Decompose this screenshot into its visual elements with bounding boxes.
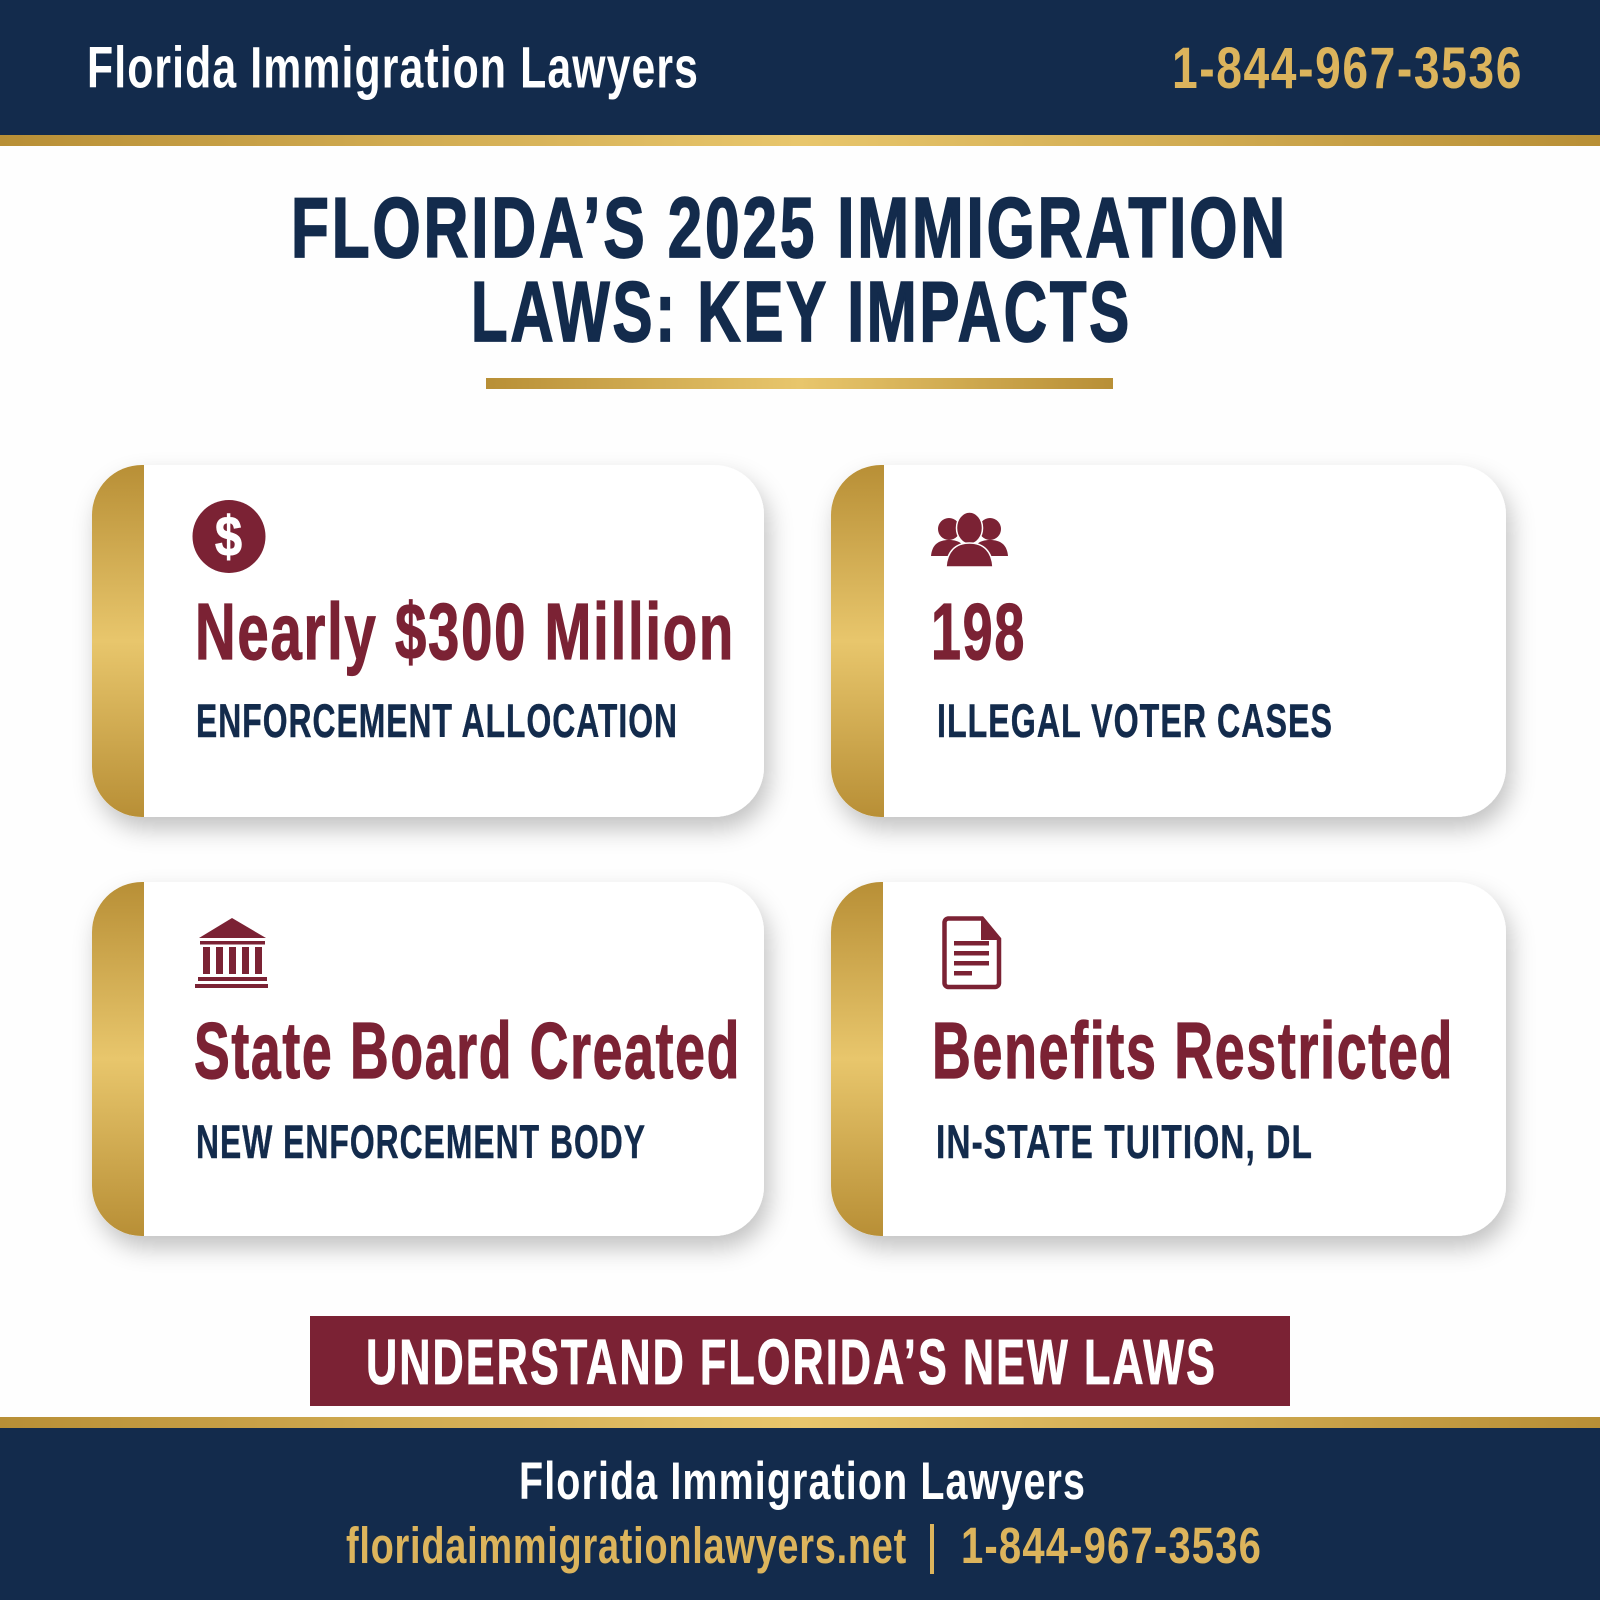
title xyxy=(291,181,1288,360)
stat heading: 198 xyxy=(931,587,1026,676)
call-to-action banner xyxy=(310,1316,1290,1406)
footer bar xyxy=(0,1417,1600,1600)
footer firm name: Florida Immigration Lawyers xyxy=(519,1452,1086,1511)
title underline xyxy=(486,378,1113,389)
panel: state board created xyxy=(92,882,764,1236)
panel: nearly $300 million xyxy=(92,465,764,817)
call-to-action banner: UNDERSTAND FLORIDA’S NEW LAWS xyxy=(366,1326,1217,1398)
icon: dollar coin xyxy=(192,500,266,573)
header bar xyxy=(0,0,1600,146)
stat heading: State Board Created xyxy=(194,1006,741,1095)
icon: dollar coin: $ xyxy=(215,505,242,569)
stat label: ILLEGAL VOTER CASES xyxy=(937,694,1333,747)
stat label: NEW ENFORCEMENT BODY xyxy=(196,1115,646,1168)
icon: people group xyxy=(931,512,1008,567)
footer website and phone: 1-844-967-3536 xyxy=(961,1517,1262,1574)
icon: government building xyxy=(195,918,268,988)
header firm name: Florida Immigration Lawyers xyxy=(87,36,699,100)
stat label: ENFORCEMENT ALLOCATION xyxy=(196,694,678,747)
title: LAWS: KEY IMPACTS xyxy=(471,265,1132,360)
panel: benefits restricted xyxy=(831,882,1506,1236)
stat label: IN-STATE TUITION, DL xyxy=(936,1115,1313,1168)
stat heading: Nearly $300 Million xyxy=(195,587,735,676)
icon: document xyxy=(944,918,999,987)
header phone number: 1-844-967-3536 xyxy=(1172,36,1523,101)
panel: 198 voter cases xyxy=(831,465,1506,817)
footer website and phone: floridaimmigrationlawyers.net xyxy=(346,1517,907,1574)
